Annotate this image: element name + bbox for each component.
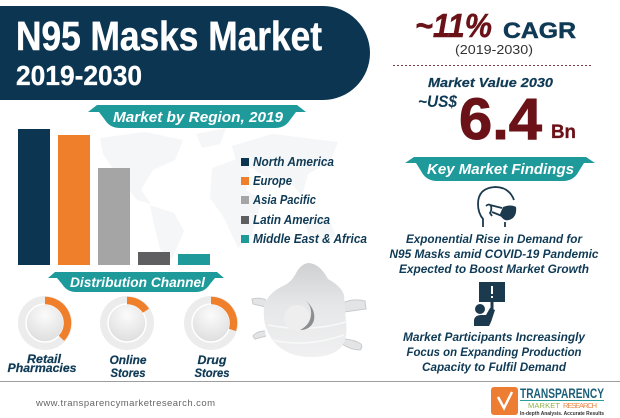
logo: transparency market research: MARKET — [528, 401, 560, 410]
finding text 1 — [390, 232, 599, 276]
image: N95 mask — [252, 263, 366, 357]
finding text 2: Focus on Expanding Production — [406, 345, 582, 359]
market value stat — [418, 75, 576, 152]
legend: Middle East & Africa — [253, 232, 367, 246]
label: retail pharmacies — [8, 354, 76, 375]
donut: retail pharmacies — [18, 296, 72, 350]
logo: transparency market research — [491, 385, 604, 417]
label: online stores — [110, 355, 147, 380]
heading: market by region — [88, 105, 306, 128]
heading: key market findings — [405, 157, 595, 181]
market value stat: 6.4 — [459, 87, 542, 152]
label: online stores: Online — [110, 355, 147, 367]
CAGR stat — [415, 7, 576, 57]
legend: Asia Pacific — [252, 193, 316, 207]
finding text 1: N95 Masks amid COVID-19 Pandemic — [390, 247, 599, 261]
market value stat: Bn — [551, 122, 576, 143]
title banner — [0, 6, 370, 100]
icon: person holding sign — [474, 282, 505, 326]
label: online stores: Stores — [110, 368, 146, 380]
label: retail pharmacies: Retail — [27, 354, 62, 366]
CAGR stat: (2019-2030) — [455, 42, 533, 57]
world map background — [100, 128, 338, 259]
title banner: 2019-2030 — [16, 60, 142, 91]
label: drug stores: Stores — [194, 368, 230, 380]
heading: distribution channel — [48, 272, 224, 292]
finding text 2: Capacity to Fulfil Demand — [422, 360, 567, 374]
legend — [241, 155, 367, 246]
finding text 1: Exponential Rise in Demand for — [406, 232, 583, 246]
market value stat: Market Value 2030 — [428, 75, 554, 90]
CAGR stat: ~11% — [415, 7, 492, 44]
label: retail pharmacies: Pharmacies — [8, 363, 76, 375]
icon: head with mask — [478, 187, 516, 227]
finding text 2: Market Participants Increasingly — [403, 330, 586, 344]
finding text 2 — [403, 330, 586, 374]
bar chart — [18, 129, 210, 265]
logo: transparency market research: In-depth Analysis. Accurate Results — [520, 411, 604, 417]
dotted divider — [393, 64, 592, 66]
divider line — [0, 381, 620, 382]
finding text 1: Expected to Boost Market Growth — [399, 262, 589, 276]
logo: transparency market research: RESEARCH — [563, 401, 597, 410]
donut: drug stores — [184, 296, 238, 350]
website url: www.transparencymarketresearch.com — [35, 398, 215, 409]
label: drug stores: Drug — [198, 355, 226, 367]
CAGR stat: CAGR — [503, 18, 576, 43]
heading: distribution channel: Distribution Channel — [70, 274, 206, 290]
donut: online stores — [100, 296, 154, 350]
legend: Latin America — [253, 213, 330, 227]
label: drug stores — [194, 355, 230, 380]
heading: key market findings: Key Market Findings — [427, 161, 574, 178]
legend: Europe — [253, 174, 292, 188]
title banner: N95 Masks Market — [16, 13, 322, 59]
heading: market by region: Market by Region, 2019 — [113, 109, 284, 126]
legend: North America — [253, 155, 334, 169]
market value stat: ~US$ — [418, 92, 457, 111]
